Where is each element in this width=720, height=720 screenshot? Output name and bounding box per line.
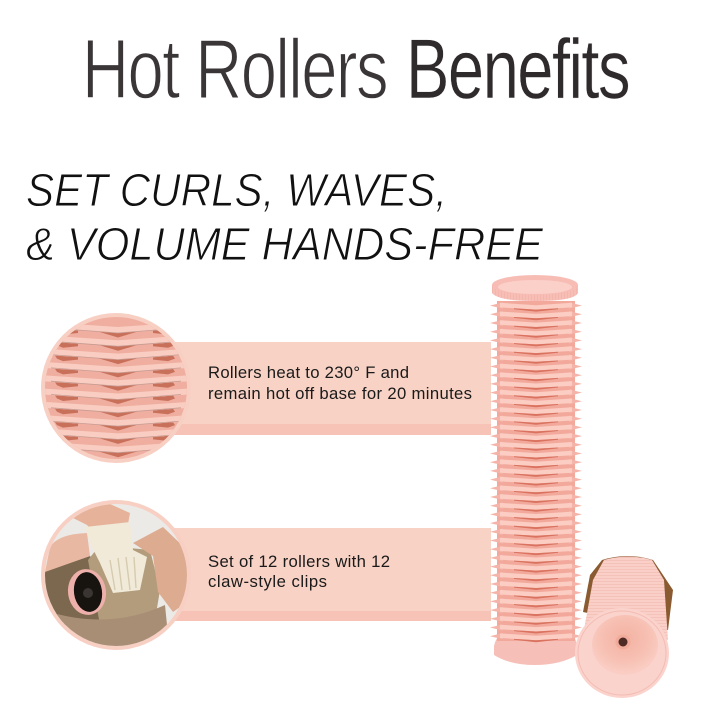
icon: roller texture close-up xyxy=(41,313,191,470)
text: clips benefit: Set of 12 rollers with 12 xyxy=(208,552,390,571)
text: heat benefit: Rollers heat to 230° F and xyxy=(208,363,409,382)
title: Hot Rollers xyxy=(82,22,387,116)
illustration: lying roller xyxy=(575,556,673,698)
bottom cap xyxy=(494,632,577,665)
top cap xyxy=(492,275,578,301)
text: heat benefit: remain hot off base for 20 minutes xyxy=(208,384,472,403)
left finger xyxy=(45,533,90,572)
top fingers xyxy=(74,504,130,527)
title: Benefits xyxy=(406,22,629,116)
panel: clips benefit band xyxy=(170,528,491,621)
dark hair xyxy=(45,556,99,625)
claw clip xyxy=(85,522,147,593)
panel: heat benefit band xyxy=(170,342,491,435)
illustration: standing roller xyxy=(490,275,582,665)
subheading: SET CURLS, WAVES, xyxy=(26,164,447,216)
blond hair xyxy=(88,548,160,620)
roller end xyxy=(68,569,106,615)
subheading xyxy=(26,164,544,270)
right hand xyxy=(133,527,190,612)
scalp xyxy=(56,605,167,646)
text: clips benefit: claw-style clips xyxy=(208,572,327,591)
subheading: & VOLUME HANDS-FREE xyxy=(26,218,544,270)
finned body xyxy=(490,301,582,642)
icon: roller in hair photo xyxy=(41,499,191,655)
